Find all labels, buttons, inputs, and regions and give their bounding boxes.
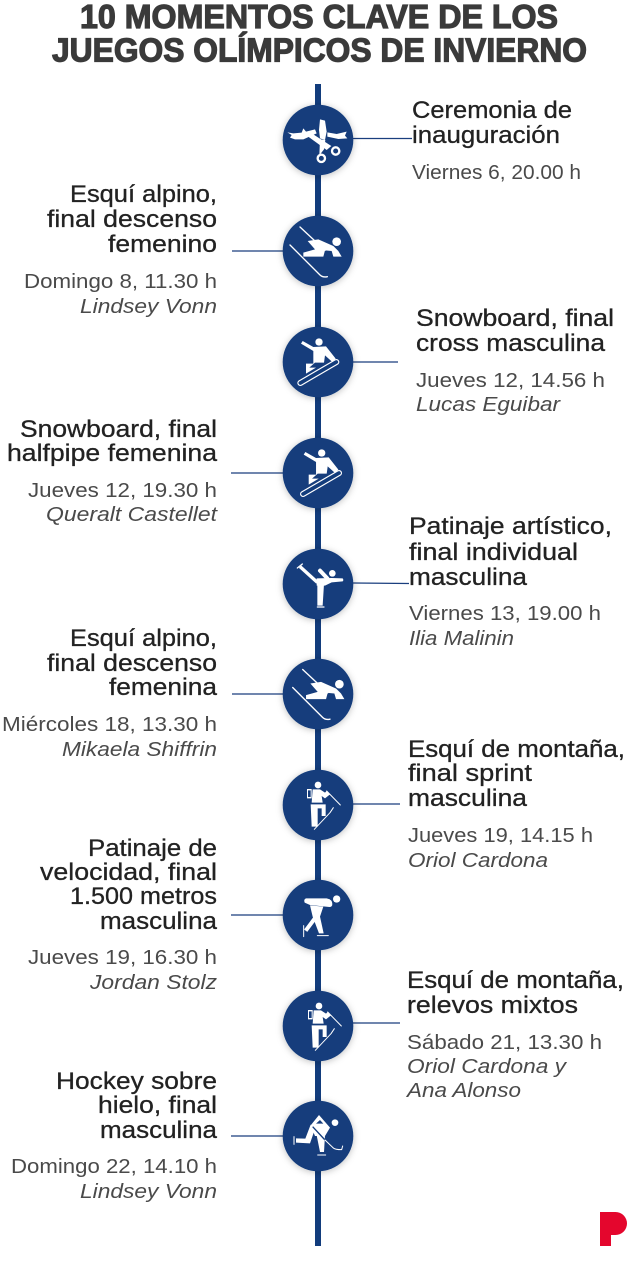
event 6: esquí alpino femenina: final descenso — [47, 650, 217, 677]
event 2: esquí alpino femenino: Esquí alpino, — [70, 181, 217, 208]
event 6: esquí alpino femenina: Miércoles 18, 13.30 h — [2, 713, 217, 736]
event 8: patinaje de velocidad: 1.500 metros — [70, 883, 217, 910]
event 3: snowboard cross: Snowboard, final — [416, 305, 614, 332]
event 4: snowboard halfpipe: halfpipe femenina — [7, 440, 217, 467]
event 4: snowboard halfpipe: Snowboard, final — [20, 416, 217, 443]
event 2: esquí alpino femenino — [24, 181, 353, 318]
event 10: hockey sobre hielo: Hockey sobre — [56, 1068, 217, 1095]
event 4: snowboard halfpipe: Jueves 12, 19.30 h — [28, 479, 217, 502]
icon: alpine skier — [290, 227, 342, 277]
event 3: snowboard cross: Lucas Eguibar — [416, 393, 561, 416]
event 8: patinaje de velocidad: Jordan Stolz — [89, 971, 217, 994]
event 1: ceremonia de inauguración — [283, 97, 581, 184]
event 9: esquí de montaña relevos — [283, 967, 624, 1102]
event 9: esquí de montaña relevos: Sábado 21, 13.30 h — [407, 1031, 602, 1054]
event 7: esquí de montaña sprint: Esquí de montaña, — [408, 736, 625, 763]
event 5: patinaje artístico: Patinaje artístico, — [409, 513, 612, 540]
event 2: esquí alpino femenino: final descenso — [47, 206, 217, 233]
event 2: esquí alpino femenino: Domingo 8, 11.30 h — [24, 270, 217, 293]
icon: ski mountaineer — [307, 782, 340, 829]
event 6: esquí alpino femenina: Esquí alpino, — [70, 625, 217, 652]
event 7: esquí de montaña sprint: Jueves 19, 14.15 h — [408, 824, 593, 847]
event 5: patinaje artístico: masculina — [409, 564, 527, 591]
icon: figure skater — [297, 564, 343, 607]
event 4: snowboard halfpipe: Queralt Castellet — [46, 503, 218, 526]
event 6: esquí alpino femenina: Mikaela Shiffrin — [62, 738, 217, 761]
event 8: patinaje de velocidad: Jueves 19, 16.30 h — [28, 946, 217, 969]
event 10: hockey sobre hielo — [11, 1068, 353, 1203]
event 10: hockey sobre hielo: masculina — [100, 1117, 217, 1144]
event 9: esquí de montaña relevos: Esquí de montaña, — [407, 967, 624, 994]
event 7: esquí de montaña sprint — [283, 736, 625, 872]
event 7: esquí de montaña sprint: Oriol Cardona — [408, 849, 548, 872]
event 2: esquí alpino femenino: femenino — [108, 231, 217, 258]
event 9: esquí de montaña relevos: relevos mixtos — [407, 992, 578, 1019]
event 10: hockey sobre hielo: hielo, final — [98, 1092, 217, 1119]
icon: hockey player — [294, 1115, 343, 1155]
icon: ski mountaineer — [308, 1003, 341, 1050]
logo — [600, 1212, 627, 1246]
event 2: esquí alpino femenino: Lindsey Vonn — [80, 295, 217, 318]
event 9: esquí de montaña relevos: Oriol Cardona y — [407, 1055, 568, 1078]
event 8: patinaje de velocidad: masculina — [100, 908, 217, 935]
event 10: hockey sobre hielo: Lindsey Vonn — [80, 1180, 217, 1203]
event 3: snowboard cross: cross masculina — [416, 330, 605, 357]
icon: speed skater — [304, 895, 340, 937]
event 4: snowboard halfpipe — [7, 416, 353, 526]
title — [52, 0, 587, 68]
timeline axis — [315, 84, 321, 1246]
event 3: snowboard cross: Jueves 12, 14.56 h — [416, 369, 605, 392]
event 5: patinaje artístico — [283, 513, 612, 650]
icon: snowboarder — [300, 338, 336, 383]
icon: snowboarder — [303, 449, 339, 494]
event 3: snowboard cross — [283, 305, 614, 416]
title: JUEGOS OLÍMPICOS DE INVIERNO — [52, 32, 587, 68]
event 1: ceremonia de inauguración: Ceremonia de — [412, 97, 572, 124]
event 5: patinaje artístico: Viernes 13, 19.00 h — [409, 602, 601, 625]
event 5: patinaje artístico: Ilia Malinin — [409, 627, 514, 650]
event 7: esquí de montaña sprint: final sprint — [408, 760, 532, 787]
event 5: patinaje artístico: final individual — [409, 539, 578, 566]
event 6: esquí alpino femenina — [2, 625, 353, 761]
icon: ribbon and scissors — [287, 119, 347, 162]
event 6: esquí alpino femenina: femenina — [109, 674, 217, 701]
event 8: patinaje de velocidad: velocidad, final — [40, 859, 217, 886]
event 8: patinaje de velocidad — [28, 835, 353, 994]
icon: alpine skier — [293, 670, 344, 719]
event 1: ceremonia de inauguración: Viernes 6, 20.00 h — [412, 161, 581, 184]
event 7: esquí de montaña sprint: masculina — [408, 785, 527, 812]
event 9: esquí de montaña relevos: Ana Alonso — [405, 1079, 521, 1102]
event 10: hockey sobre hielo: Domingo 22, 14.10 h — [11, 1155, 217, 1178]
event 8: patinaje de velocidad: Patinaje de — [88, 835, 217, 862]
event 1: ceremonia de inauguración: inauguración — [412, 122, 560, 149]
